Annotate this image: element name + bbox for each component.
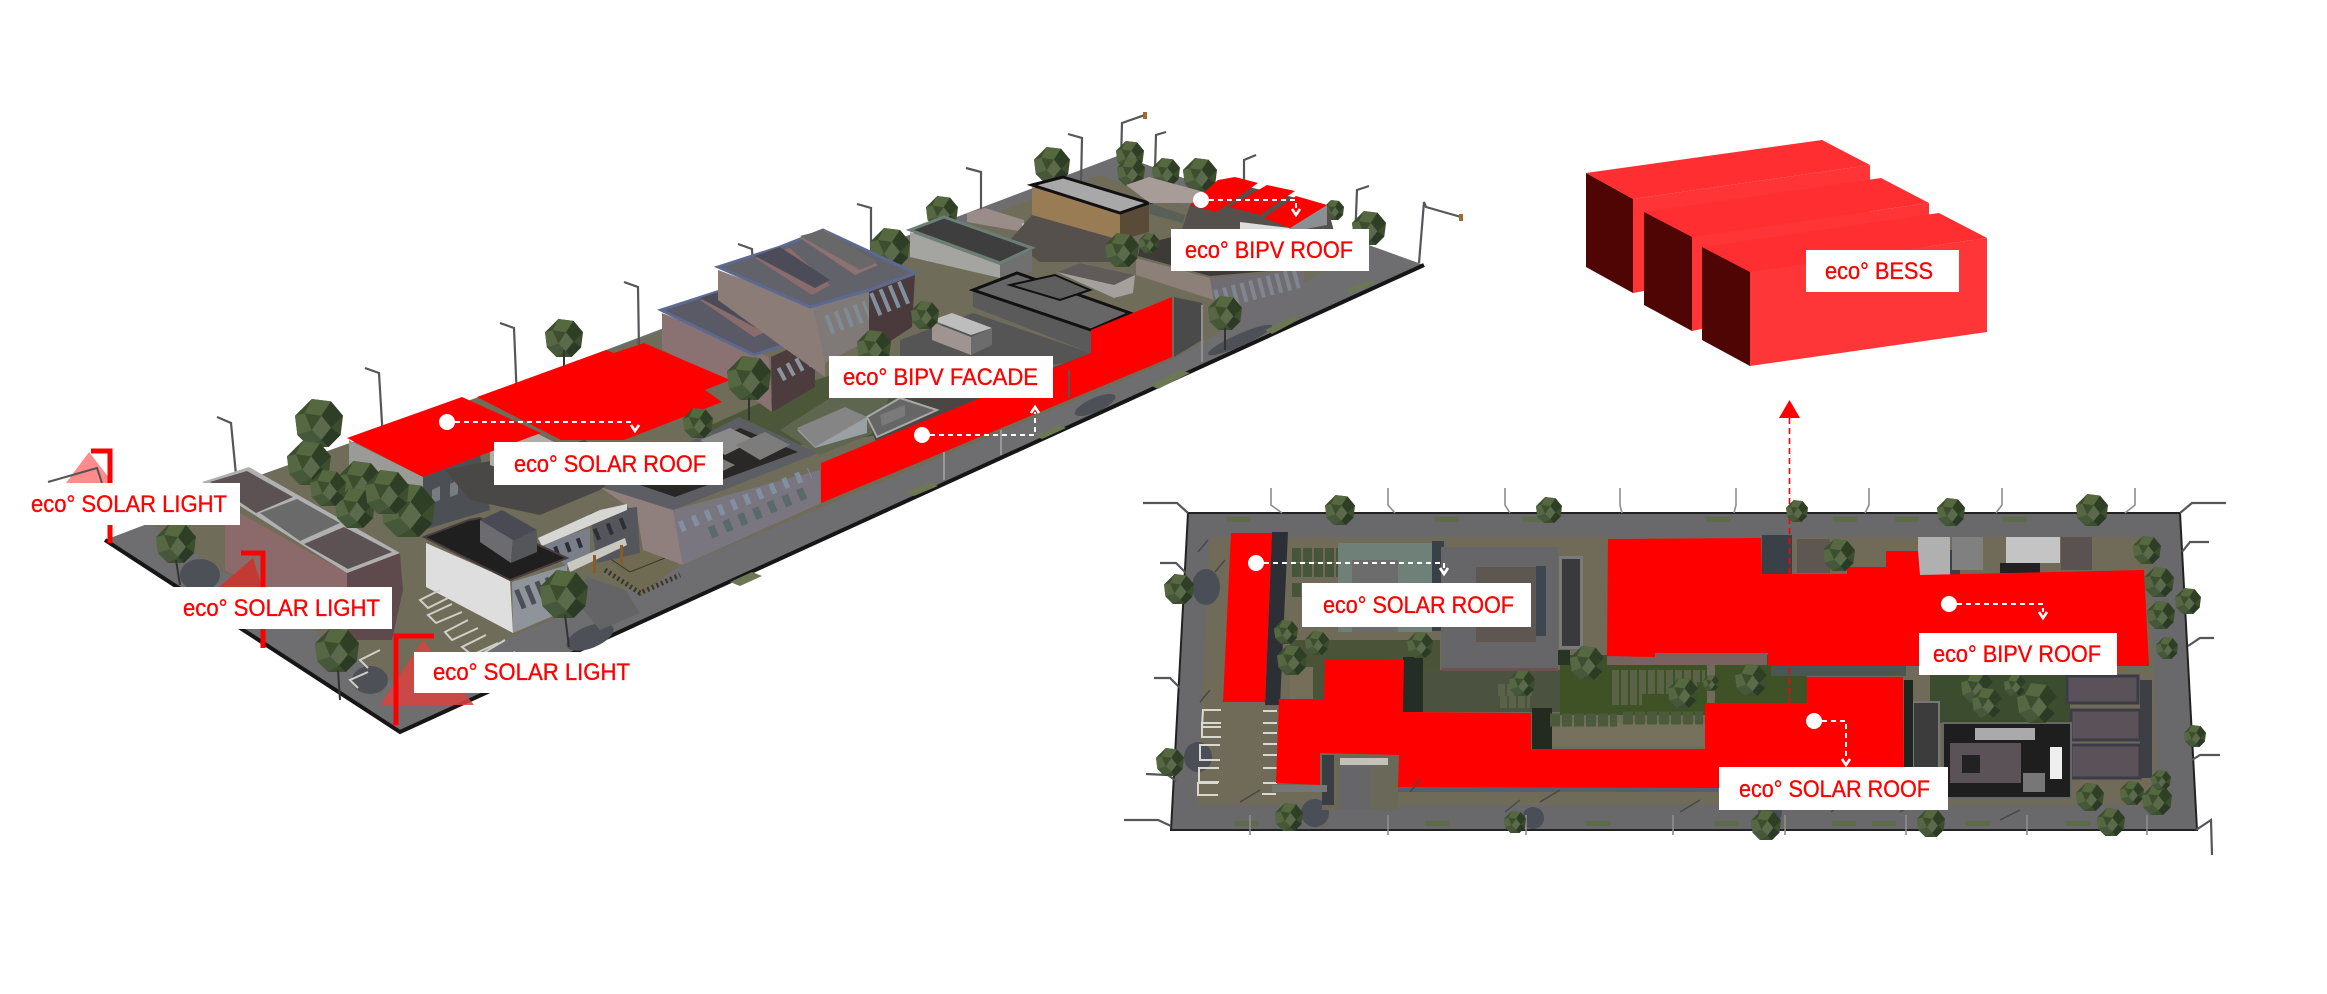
right windows building xyxy=(1136,258,1214,300)
BIPV roof red panels on iso view xyxy=(1190,177,1327,228)
front container xyxy=(1702,213,1987,366)
label: plan BIPV roof: eco° BIPV ROOF xyxy=(1933,641,2101,668)
plan lawn xyxy=(1290,640,2070,750)
plan red strip roof xyxy=(1223,533,1272,702)
BESS link dashed line and arrow xyxy=(1779,400,1800,703)
label: solar light 2 xyxy=(172,587,392,629)
solar light red markers xyxy=(48,451,474,725)
plan ground xyxy=(1171,513,2197,830)
label: iso BIPV facade: eco° BIPV FACADE xyxy=(843,364,1038,391)
iso grass courtyard xyxy=(700,360,930,450)
iso middle buildings xyxy=(180,417,821,694)
red solar roof surfaces on iso view xyxy=(347,343,730,477)
marker 3 xyxy=(380,636,474,725)
iso back trees xyxy=(545,141,1386,366)
plan bottom red roof xyxy=(1276,660,1904,790)
leader: iso solar roof xyxy=(439,414,639,431)
plan inner lot xyxy=(1197,537,2158,805)
iso roofs behind facade xyxy=(780,353,1091,455)
BIPV facade red surface on iso view xyxy=(821,297,1172,503)
marker 2 xyxy=(219,553,263,648)
isometric street block xyxy=(48,112,1463,732)
parking bays xyxy=(350,590,515,688)
leader: plan solar roof west xyxy=(1248,555,1448,574)
pink long building xyxy=(225,505,347,640)
central dark-lined building xyxy=(973,292,1091,353)
red-roof building walls xyxy=(349,440,423,530)
iso back buildings xyxy=(661,177,1335,412)
label: plan BIPV roof xyxy=(1919,633,2117,675)
label: iso solar roof xyxy=(494,442,723,485)
green building xyxy=(910,232,1000,278)
callout dots and dashed leaders xyxy=(439,192,2047,765)
label: iso BIPV roof xyxy=(1171,229,1369,271)
plan trees xyxy=(1156,494,2206,840)
leader: plan solar roof south xyxy=(1806,713,1850,765)
plan top red roof xyxy=(1607,538,2149,666)
label: plan solar roof south: eco° SOLAR ROOF xyxy=(1739,776,1930,803)
plan view block xyxy=(1124,400,2226,855)
tan building xyxy=(1032,187,1120,240)
iso front trees xyxy=(156,233,1242,700)
label: plan solar roof south xyxy=(1719,767,1948,810)
dark building xyxy=(1913,702,1939,777)
rooftop equipment building xyxy=(600,487,683,565)
label: iso solar roof: eco° SOLAR ROOF xyxy=(514,451,706,478)
white building xyxy=(426,543,513,633)
blue-grey townhouse xyxy=(590,507,640,563)
label: iso BIPV facade xyxy=(829,356,1053,398)
label: solar light 1: eco° SOLAR LIGHT xyxy=(31,491,227,518)
small roof area xyxy=(900,313,1091,380)
strip building shadow xyxy=(1265,532,1288,705)
marker 1 xyxy=(48,451,113,543)
BESS battery containers xyxy=(1586,140,1987,366)
leader: iso BIPV roof xyxy=(1193,192,1300,215)
label: BESS xyxy=(1806,250,1959,292)
plan hedges xyxy=(1292,555,1705,720)
pale block behind green building xyxy=(967,208,1024,232)
label: solar light 3 xyxy=(414,652,650,693)
label: solar light 1 xyxy=(20,483,240,525)
iso street beds and shadows xyxy=(563,280,1375,657)
pink building with vault xyxy=(662,313,772,412)
plan parking bays xyxy=(1198,710,1277,795)
middle container xyxy=(1644,178,1929,331)
entry driveway xyxy=(1322,755,1398,810)
iso back row street lamps xyxy=(217,112,1463,475)
roof behind townhouse xyxy=(445,440,625,515)
leader: iso BIPV facade xyxy=(914,407,1039,443)
street shadow patches xyxy=(180,559,220,591)
grey tall building xyxy=(718,270,825,377)
low building behind tan xyxy=(1149,203,1185,223)
label: solar light 2: eco° SOLAR LIGHT xyxy=(183,595,380,622)
leader: plan BIPV roof xyxy=(1941,596,2047,618)
containers in plan xyxy=(2067,676,2138,703)
label: iso BIPV roof: eco° BIPV ROOF xyxy=(1185,237,1353,264)
label: solar light 3: eco° SOLAR LIGHT xyxy=(433,659,630,686)
fenced yard xyxy=(600,535,680,595)
plan street lamps xyxy=(1124,488,2226,855)
label: plan solar roof west xyxy=(1302,583,1531,627)
plan street beds and tree shadows xyxy=(1184,517,2090,829)
label: BESS: eco° BESS xyxy=(1825,258,1933,285)
plan neighbouring buildings xyxy=(1265,532,2152,810)
back container xyxy=(1586,140,1870,293)
iso ground xyxy=(105,155,1424,732)
label: plan solar roof west: eco° SOLAR ROOF xyxy=(1323,592,1514,619)
